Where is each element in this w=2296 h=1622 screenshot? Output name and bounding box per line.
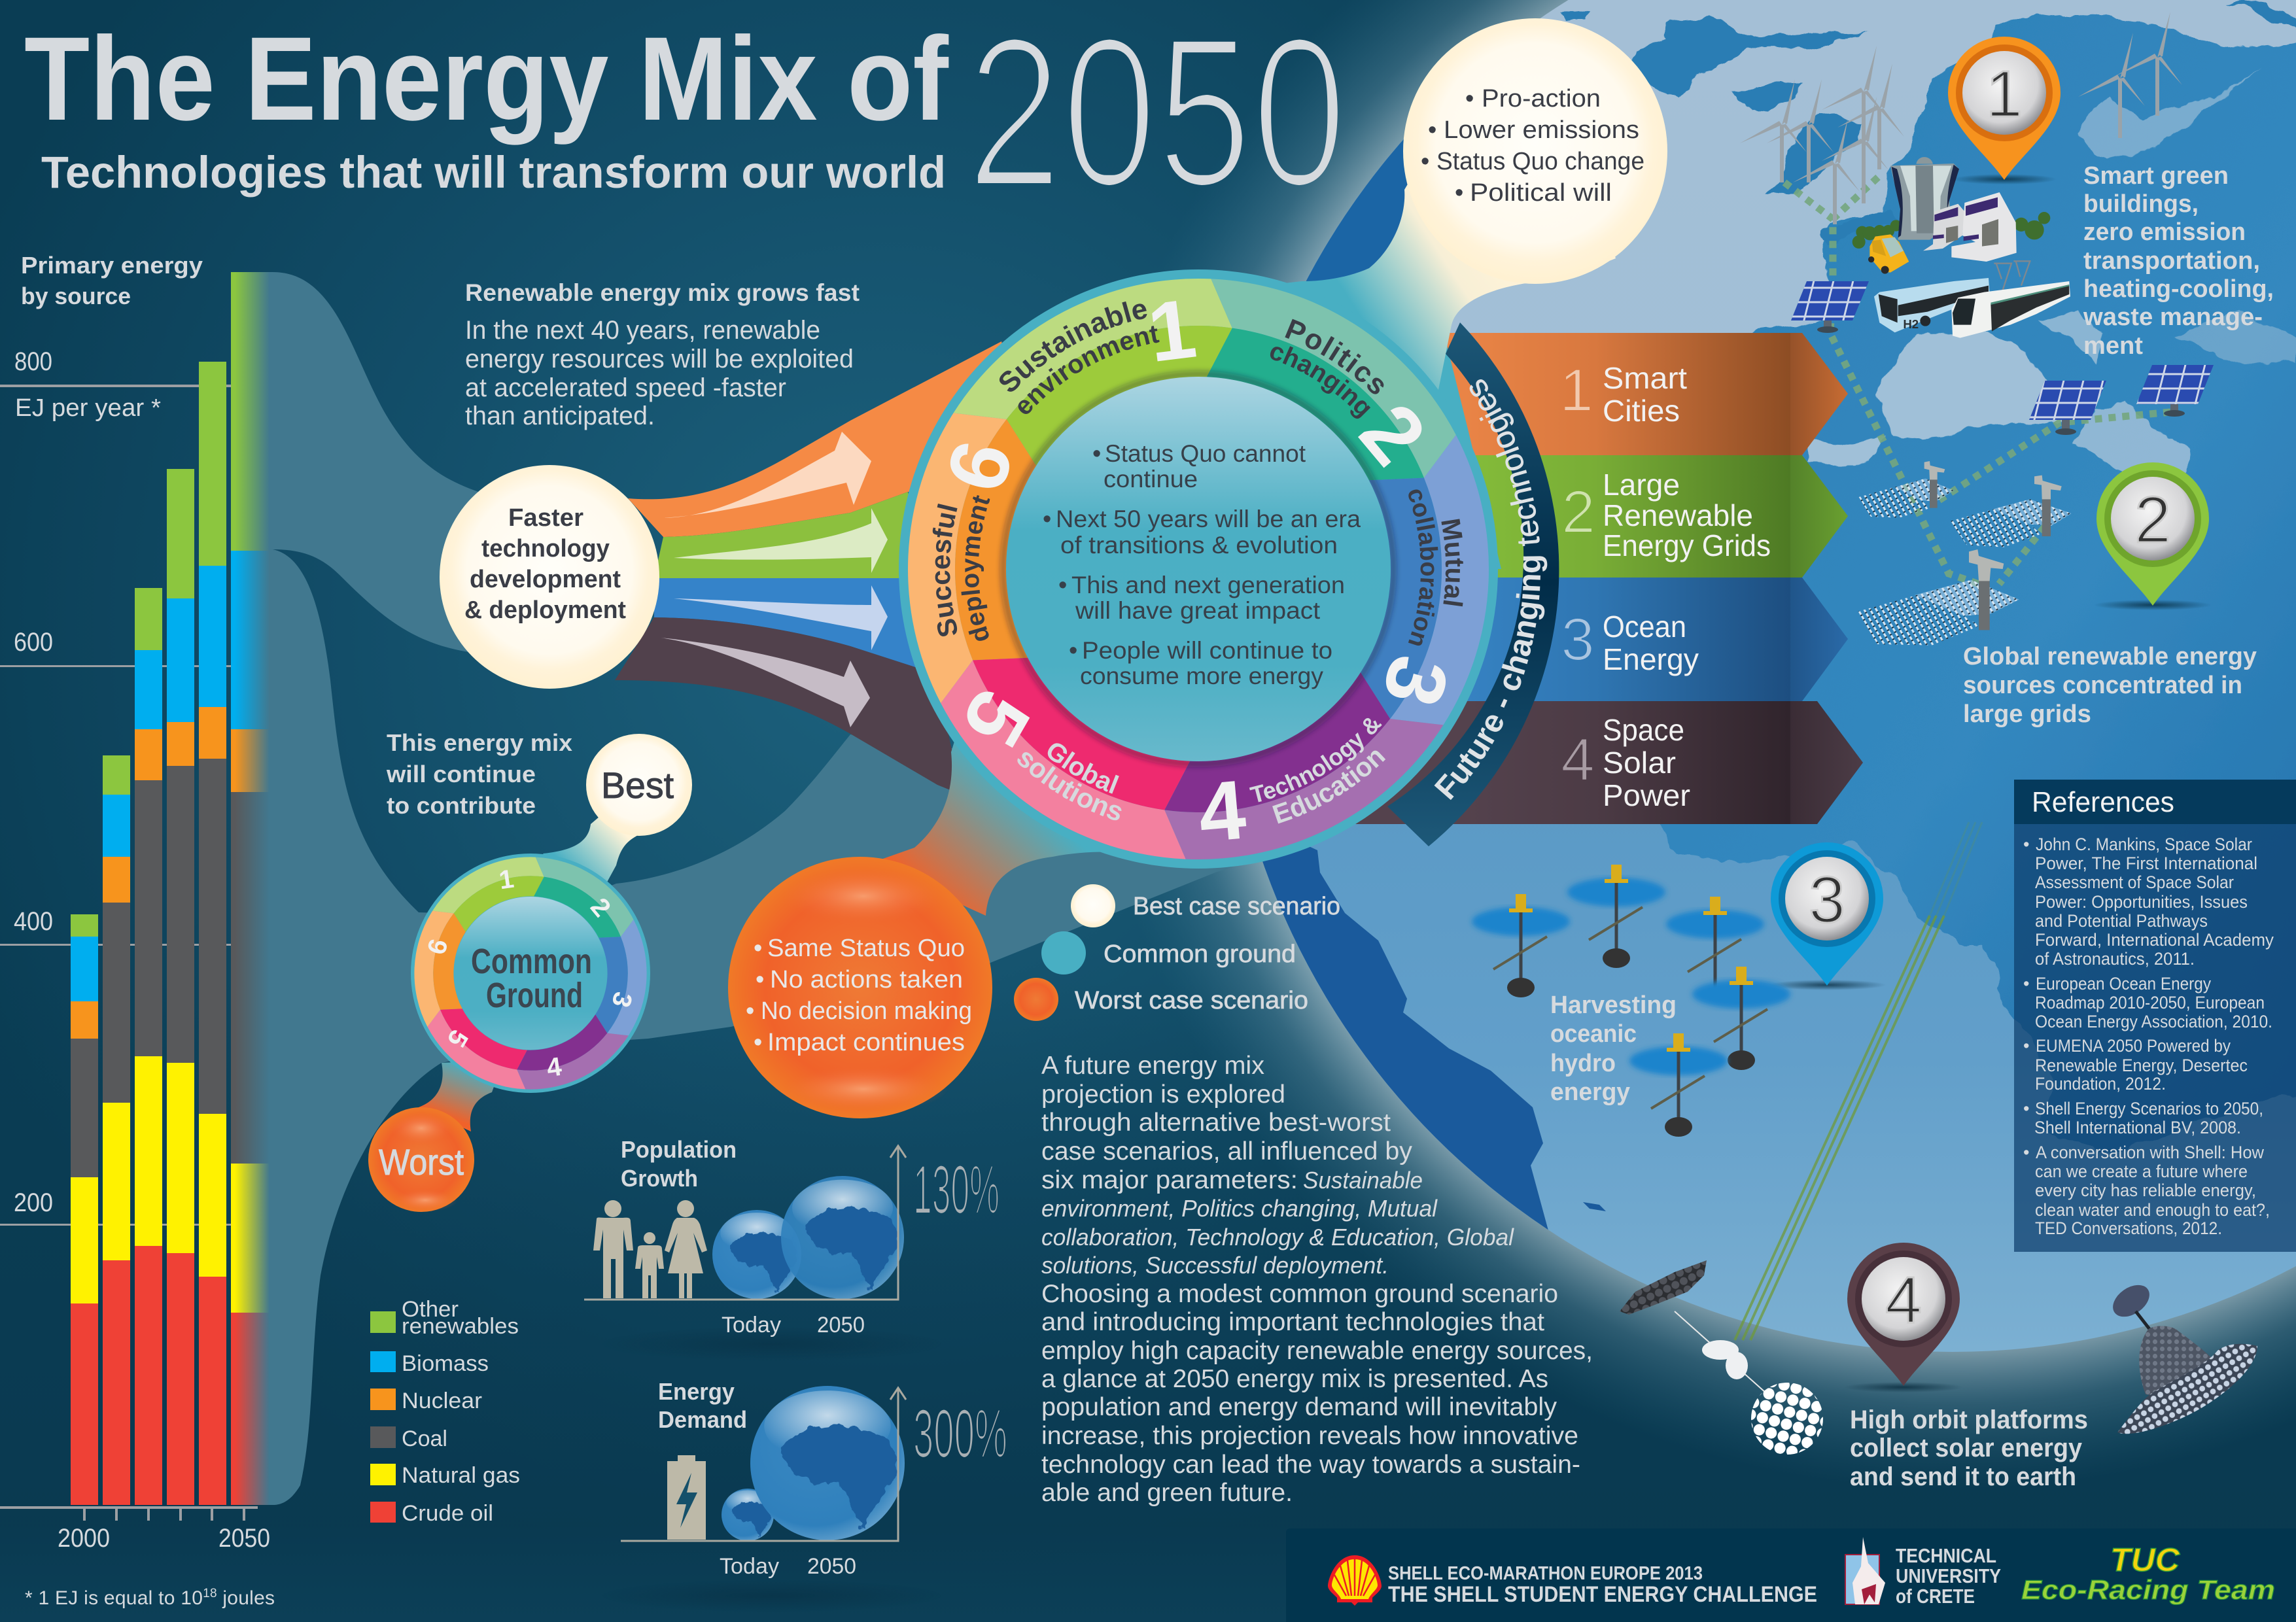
- text block: renewable mix grows fast: energy resources will be exploited: [465, 345, 854, 373]
- arrow 3: ocean energy: [1341, 578, 1848, 701]
- globe: [1177, 0, 2296, 1352]
- arrow 3: ocean energy: 3: [1561, 606, 1595, 673]
- axis labels: 600: [14, 628, 53, 657]
- reference list: Power, The First International: [2035, 854, 2257, 873]
- field one: [1859, 461, 1954, 518]
- pin 3: [1768, 842, 1886, 990]
- reference list: TED Conversations, 2012.: [2035, 1218, 2222, 1238]
- bubble: faster technology development: [440, 465, 659, 689]
- text block: future energy mix projection: solutions, Successful deployment.: [1041, 1252, 1389, 1279]
- bubble: worst: [368, 1107, 474, 1212]
- bubble: pro-action best case: Pro-action: [1482, 85, 1601, 112]
- text block: future energy mix projection: employ high capacity renewable energy sources,: [1041, 1337, 1593, 1365]
- arrow 1: smart cities: Cities: [1603, 394, 1680, 428]
- text block: future energy mix projection: environment, Politics changing, Mutual: [1041, 1195, 1438, 1222]
- flow streams into wheel: [615, 341, 1047, 795]
- text: global renewable energy: [1963, 643, 2257, 728]
- wheel segment labels: Succesful: [925, 500, 964, 640]
- hydrogen bus: [1874, 278, 1990, 332]
- text block: renewable mix grows fast: Renewable energy mix grows fast: [465, 279, 860, 306]
- wheel centre text: Status Quo cannot: [1105, 440, 1306, 467]
- arrow 2: large renewable energy grids: 2: [1561, 479, 1595, 545]
- reference list: Roadmap 2010-2050, European: [2035, 993, 2265, 1012]
- chart heading: Primary energy: [21, 252, 203, 279]
- small wheel numbers: 3: [606, 989, 638, 1010]
- reference list: •: [2023, 1143, 2029, 1162]
- wheel segment labels: Education: [1272, 751, 1385, 824]
- wheel numbers: 5: [944, 674, 1048, 761]
- banner: future changing technologies: Future - changing technologies: [1434, 379, 1548, 801]
- logo: technical university of crete: [1845, 1537, 1885, 1604]
- footnote: * 1 EJ is equal to 10: [25, 1587, 203, 1609]
- scenario legend: Worst case scenario: [1075, 987, 1308, 1014]
- chart heading: [21, 252, 203, 309]
- arrow 1: smart cities: [1341, 333, 1848, 455]
- chart legend: renewables: [402, 1314, 519, 1339]
- text: smart green buildings: buildings,: [2083, 190, 2199, 218]
- scenario legend: Common ground: [1104, 940, 1296, 968]
- icon: family: [593, 1200, 707, 1298]
- text: technical university: UNIVERSITY: [1896, 1564, 2001, 1587]
- bubble: best: Best: [601, 765, 674, 806]
- axis labels: 800: [14, 347, 52, 376]
- arrow 1: smart cities: Smart: [1603, 361, 1687, 395]
- year: 2050: [967, 0, 1347, 232]
- bubble: faster technology development: development: [470, 566, 621, 593]
- text block: future energy mix projection: through alternative best-worst: [1041, 1109, 1391, 1137]
- text block: future energy mix projection: Choosing a modest common ground scenario: [1041, 1280, 1558, 1308]
- small wheel: common ground: Common: [471, 942, 592, 981]
- text: high orbit platforms: [1850, 1406, 2088, 1491]
- small wheel numbers: 1: [497, 865, 515, 895]
- bubble: best: [586, 734, 692, 836]
- text block: future energy mix projection: six major parameters:: [1041, 1166, 1298, 1194]
- segment 4: technology and education: [1144, 621, 1443, 937]
- reference list: Shell Energy Scenarios to 2050,: [2035, 1099, 2263, 1118]
- text: shell eco-marathon: THE SHELL STUDENT ENERGY CHALLENGE: [1388, 1582, 1817, 1607]
- bubble: pro-action best case: Status Quo change: [1436, 148, 1644, 175]
- text: smart green buildings: transportation,: [2083, 247, 2260, 275]
- reference list: Shell International BV, 2008.: [2034, 1118, 2241, 1137]
- wheel centre text: People will continue to: [1082, 637, 1332, 664]
- wheel numbers: 1: [1143, 282, 1201, 380]
- text: smart green buildings: ment: [2083, 332, 2143, 360]
- text: this energy mix: This energy mix: [387, 729, 572, 756]
- chart: energy demand: 300%: [913, 1396, 1007, 1472]
- bubble: worst case status quo: •: [754, 1029, 762, 1056]
- text: high orbit platforms: High orbit platforms: [1850, 1406, 2088, 1434]
- banner: future changing technologies: [1387, 322, 1559, 846]
- footnote: 18: [203, 1587, 217, 1600]
- text block: renewable mix grows fast: at accelerated speed -faster: [465, 373, 786, 402]
- reference list: of Astronautics, 2011.: [2035, 949, 2195, 969]
- logo: tuc eco-racing team: TUC: [2110, 1542, 2180, 1578]
- reference list: clean water and enough to eat?,: [2035, 1200, 2270, 1220]
- illustration: smart city: [1852, 157, 2070, 338]
- bubble: worst case status quo: •: [756, 966, 764, 993]
- text: global renewable energy: large grids: [1963, 700, 2091, 728]
- segment 5: global solutions: [934, 654, 1194, 859]
- chart: energy demand: Today: [720, 1554, 779, 1579]
- text: smart green buildings: [2083, 162, 2274, 360]
- land: Europe and Africa: [1660, 13, 2296, 1152]
- text: shell eco-marathon: SHELL ECO-MARATHON EUROPE 2013: [1388, 1563, 1703, 1584]
- text: smart green buildings: heating-cooling,: [2083, 275, 2274, 303]
- text block: future energy mix projection: A future energy mix: [1041, 1052, 1265, 1080]
- pin 2: 2: [2134, 483, 2171, 557]
- wheel segment labels: [925, 292, 1470, 830]
- wheel segment labels: Politics: [1285, 319, 1384, 394]
- seas over land: [1807, 68, 2296, 472]
- arrow 2: large renewable energy grids: Energy Grids: [1603, 528, 1771, 562]
- chart: population growth: Today: [722, 1313, 781, 1337]
- illustration: solar collector bell: [2107, 1279, 2257, 1434]
- text block: future energy mix projection: a glance at 2050 energy mix is presented. As: [1041, 1365, 1548, 1393]
- pin 4: [1845, 1243, 1962, 1392]
- logo: shell: [1328, 1555, 1382, 1606]
- text: harvesting oceanic hydro energy: hydro: [1550, 1050, 1616, 1077]
- reference list: •: [2023, 1036, 2029, 1056]
- arrow: dark stream: [661, 638, 870, 727]
- wheel numbers: 2: [1342, 387, 1444, 482]
- reference list: Foundation, 2012.: [2035, 1074, 2166, 1094]
- bubble: pro-action best case: [1403, 18, 1667, 284]
- arrow 3: ocean energy: Energy: [1603, 642, 1699, 676]
- text: this energy mix: [386, 729, 572, 819]
- text block: renewable mix grows fast: [465, 279, 860, 430]
- main heading: The Energy Mix of: [24, 12, 948, 145]
- reference list: •: [2023, 1099, 2029, 1118]
- icon: globe 2050: [781, 1176, 904, 1299]
- text block: renewable mix grows fast: In the next 40 years, renewable: [465, 316, 820, 345]
- chart legend: Coal: [402, 1426, 447, 1451]
- wheel numbers: 4: [1195, 763, 1249, 860]
- bubble: pro-action best case: •: [1421, 148, 1429, 175]
- title: [24, 0, 1347, 232]
- reference list: John C. Mankins, Space Solar: [2036, 835, 2252, 854]
- tower: [1890, 157, 1959, 240]
- text: this energy mix: to contribute: [387, 792, 536, 819]
- bubble: faster technology development: technology: [481, 535, 610, 562]
- text: harvesting oceanic hydro energy: energy: [1550, 1078, 1630, 1106]
- chart: population growth: Population: [621, 1136, 737, 1163]
- bubble: worst case status quo: •: [754, 935, 762, 962]
- arrow: blue stream: [674, 585, 888, 650]
- wheel centre text: of transitions & evolution: [1060, 532, 1338, 559]
- reference list: Forward, International Academy: [2035, 930, 2274, 950]
- logo: tuc eco-racing team: [2021, 1542, 2275, 1605]
- wheel centre text: Next 50 years will be an era: [1056, 506, 1361, 532]
- bubble: pro-action best case: Political will: [1470, 179, 1612, 207]
- text: high orbit platforms: and send it to earth: [1850, 1462, 2076, 1491]
- bubble: worst case status quo: [728, 857, 992, 1118]
- bubble: faster technology development: Faster: [508, 504, 583, 532]
- wheel segment labels: solutions: [1011, 742, 1127, 827]
- text block: future energy mix projection: increase, this projection reveals how innovative: [1041, 1422, 1578, 1450]
- axis labels: 2050: [218, 1524, 270, 1553]
- wheel segment labels: Global: [1040, 736, 1122, 800]
- chart legend: Nuclear: [402, 1389, 482, 1413]
- text block: future energy mix projection: and introducing important technologies that: [1041, 1308, 1544, 1336]
- small wheel numbers: 6: [422, 936, 454, 958]
- arrow: orange stream: [663, 432, 871, 518]
- small wheel numbers: [422, 865, 638, 1082]
- arrow 4: space solar power: [1341, 701, 1863, 824]
- pin 1: 1: [1986, 58, 2023, 131]
- text block: future energy mix projection: collaboration, Technology & Education, Global: [1041, 1224, 1514, 1251]
- axis labels: EJ per year *: [15, 394, 161, 422]
- reference list: Ocean Energy Association, 2010.: [2035, 1012, 2272, 1031]
- reference list: [2023, 835, 2274, 1238]
- wheel numbers: 3: [1365, 646, 1467, 716]
- icon: battery: [667, 1455, 706, 1540]
- text: harvesting oceanic hydro energy: Harvesting: [1550, 992, 1677, 1019]
- text: smart green buildings: zero emission: [2083, 218, 2246, 246]
- scenario legend: [1014, 884, 1340, 1021]
- axis and gridlines: [0, 385, 258, 1521]
- arrow 4: space solar power: Power: [1603, 778, 1690, 812]
- small wheel numbers: 2: [585, 893, 616, 922]
- reference list: European Ocean Energy: [2036, 974, 2211, 993]
- scenario neck: pro-action: [1243, 131, 1616, 419]
- arrow 3: ocean energy: Ocean: [1603, 610, 1686, 644]
- arrow 2: large renewable energy grids: [1341, 455, 1848, 578]
- bubble: worst case status quo: Same Status Quo: [767, 935, 965, 962]
- chart legend: Natural gas: [402, 1463, 520, 1488]
- wheel centre text: [1043, 440, 1361, 689]
- text: this energy mix: will continue: [386, 761, 536, 787]
- small wheel: common ground: [381, 826, 680, 1120]
- text: global renewable energy: sources concentrated in: [1963, 672, 2242, 699]
- segment 6: successful deployment: [825, 390, 1113, 703]
- arrow 4: space solar power: Solar: [1603, 746, 1676, 780]
- segment 3: mutual collaboration: [1283, 435, 1572, 748]
- reference list: Renewable Energy, Desertec: [2035, 1056, 2248, 1075]
- tram: [1951, 261, 2070, 338]
- text block: future energy mix projection: population and energy demand will inevitably: [1041, 1393, 1557, 1421]
- logo: tuc eco-racing team: Eco-Racing Team: [2021, 1574, 2275, 1605]
- bubble: pro-action best case: •: [1465, 85, 1474, 112]
- segment 1: sustainable environment: [954, 201, 1253, 517]
- chart: energy demand: 2050: [807, 1554, 856, 1579]
- illustration: solar panels: [1791, 281, 2214, 435]
- field three: [1858, 549, 2019, 646]
- chart: population growth: [584, 1136, 1000, 1361]
- bubble: pro-action best case: Lower emissions: [1444, 116, 1639, 144]
- references panel: References: [2032, 786, 2174, 818]
- bubble: worst case status quo: No decision making: [761, 997, 972, 1025]
- text block: future energy mix projection: [1041, 1052, 1593, 1507]
- wheel segment labels: deployment: [956, 492, 996, 646]
- text block: future energy mix projection: case scenarios, all influenced by: [1041, 1137, 1413, 1165]
- wheel centre text: •: [1058, 572, 1067, 599]
- wheel segment labels: Mutual: [1441, 519, 1463, 607]
- pin 1: [1948, 37, 2061, 184]
- segment 2: politics changing: [1202, 279, 1463, 484]
- arrow: green stream: [674, 508, 888, 573]
- chart legend: Crude oil: [402, 1501, 493, 1526]
- chart: energy demand: Demand: [658, 1406, 747, 1433]
- axis labels: 400: [14, 907, 53, 936]
- bubble: faster technology development: & deployment: [464, 596, 626, 624]
- wheel centre text: consume more energy: [1080, 663, 1324, 689]
- wheel flange behind banner: [1374, 327, 1501, 569]
- land: North America: [1276, 118, 1439, 294]
- stacked bars: [71, 272, 270, 1505]
- map: renewable grid links: [1784, 177, 2170, 584]
- main wheel: [825, 201, 1572, 937]
- text: technical university: [1896, 1544, 2001, 1608]
- text: smart green buildings: waste manage-: [2083, 303, 2263, 331]
- infographic canvas: 130%: [913, 1152, 1000, 1228]
- text: high orbit platforms: collect solar energy: [1850, 1434, 2083, 1462]
- illustration: concentrated solar fields: [1858, 461, 2072, 646]
- reference list: and Potential Pathways: [2035, 911, 2208, 931]
- pin 3: 3: [1809, 863, 1845, 937]
- bubble: worst case status quo: •: [746, 997, 754, 1025]
- illustration: ocean turbines: [1472, 865, 1790, 1137]
- reference list: •: [2023, 835, 2029, 854]
- chart legend: Other: [402, 1297, 459, 1322]
- arrow 2: large renewable energy grids: Renewable: [1603, 498, 1753, 532]
- arrow 2: large renewable energy grids: Large: [1603, 468, 1680, 502]
- text block: future energy mix projection: technology can lead the way towards a sustain-: [1041, 1451, 1580, 1479]
- chart legend: Biomass: [402, 1351, 489, 1376]
- pin 4: 4: [1885, 1264, 1922, 1337]
- icon: globe today: [722, 1489, 774, 1541]
- arrow 4: space solar power: 4: [1561, 727, 1595, 793]
- text block: future energy mix projection: Sustainable: [1303, 1167, 1423, 1194]
- text: harvesting oceanic hydro energy: oceanic: [1550, 1020, 1637, 1048]
- icon: globe today: [712, 1210, 801, 1299]
- arrow 1: smart cities: 1: [1559, 357, 1593, 424]
- reference list: every city has reliable energy,: [2035, 1181, 2256, 1200]
- bubble: worst: Worst: [379, 1141, 464, 1182]
- chart: primary energy by source: [0, 252, 275, 1609]
- chart: population growth: Growth: [621, 1165, 698, 1192]
- footnote: joules: [217, 1587, 275, 1609]
- text block: future energy mix projection: able and green future.: [1041, 1479, 1293, 1507]
- text: shell eco-marathon: [1388, 1563, 1817, 1607]
- trees: [1852, 212, 2050, 249]
- axis labels: 200: [14, 1188, 53, 1217]
- text block: renewable mix grows fast: than anticipated.: [465, 402, 655, 430]
- bubble: worst case status quo: Impact continues: [767, 1029, 965, 1056]
- pin 2: [2094, 462, 2212, 610]
- electric car: [1868, 234, 1909, 274]
- scenario legend: Best case scenario: [1133, 893, 1340, 920]
- small wheel numbers: 5: [442, 1025, 474, 1052]
- bubble: pro-action best case: •: [1428, 116, 1436, 144]
- references panel: [2014, 780, 2296, 1252]
- axis labels: 2000: [58, 1524, 110, 1553]
- chart heading: by source: [21, 283, 131, 309]
- wheel segment labels: Technology &: [1249, 718, 1382, 802]
- land: South America: [1177, 785, 1557, 1308]
- icon: globe 2050: [750, 1386, 905, 1540]
- land: Greenland, Iceland and Britain: [1560, 3, 2296, 245]
- chart: energy demand: [602, 1378, 1007, 1612]
- bubble: pro-action best case: •: [1455, 179, 1463, 207]
- band: flow through common ground: [262, 549, 1243, 1505]
- reference list: Power: Opportunities, Issues: [2035, 892, 2248, 912]
- text: global renewable energy: Global renewable energy: [1963, 643, 2257, 670]
- wheel segment labels: changing: [1270, 346, 1371, 419]
- small wheel: common ground: Ground: [486, 976, 583, 1015]
- chart legend: [370, 1297, 520, 1526]
- chart: population growth: 2050: [817, 1313, 865, 1337]
- arrows: four future technologies: [1341, 333, 1863, 824]
- reference list: •: [2023, 974, 2029, 993]
- necks of small wheel: [419, 798, 644, 1131]
- wheel segment labels: environment: [1018, 326, 1160, 414]
- wheel centre text: This and next generation: [1071, 572, 1345, 598]
- wheel numbers: 6: [929, 432, 1031, 501]
- scenario neck: worst: [870, 654, 1151, 916]
- hydrogen bus: H2: [1903, 317, 1919, 331]
- reference list: can we create a future where: [2035, 1162, 2248, 1181]
- field two: [1951, 475, 2072, 547]
- houses: [1923, 192, 2017, 262]
- wheel centre text: will have great impact: [1075, 597, 1321, 624]
- footer banner: [1286, 1528, 2296, 1622]
- wheel centre text: •: [1043, 506, 1051, 533]
- text block: future energy mix projection: projection is explored: [1041, 1080, 1285, 1109]
- band: flow from chart top: [262, 272, 484, 654]
- wheel segment labels: collaboration: [1408, 489, 1438, 646]
- reference list: A conversation with Shell: How: [2036, 1143, 2264, 1162]
- illustration: beam and orbital platform: [1620, 822, 1982, 1455]
- wheel centre text: •: [1069, 637, 1077, 664]
- text: harvesting oceanic hydro energy: [1550, 992, 1677, 1106]
- arrow 4: space solar power: Space: [1603, 713, 1684, 747]
- wheel centre text: •: [1092, 440, 1101, 468]
- text: technical university: TECHNICAL: [1896, 1544, 1996, 1567]
- bubble: worst case status quo: No actions taken: [770, 966, 963, 993]
- reference list: Assessment of Space Solar: [2035, 872, 2234, 892]
- small wheel numbers: 4: [545, 1052, 564, 1082]
- wheel segment labels: Sustainable: [1000, 301, 1147, 392]
- reference list: EUMENA 2050 Powered by: [2036, 1036, 2231, 1056]
- wheel numbers: [929, 282, 1467, 860]
- wheel centre text: continue: [1104, 466, 1198, 492]
- axis labels: [14, 347, 270, 1553]
- chart: energy demand: Energy: [658, 1378, 735, 1405]
- subtitle: Technologies that will transform our world: [41, 147, 946, 198]
- illustration: wind turbines: [1740, 12, 2182, 224]
- text: technical university: of CRETE: [1896, 1585, 1975, 1608]
- text: smart green buildings: Smart green: [2083, 162, 2229, 190]
